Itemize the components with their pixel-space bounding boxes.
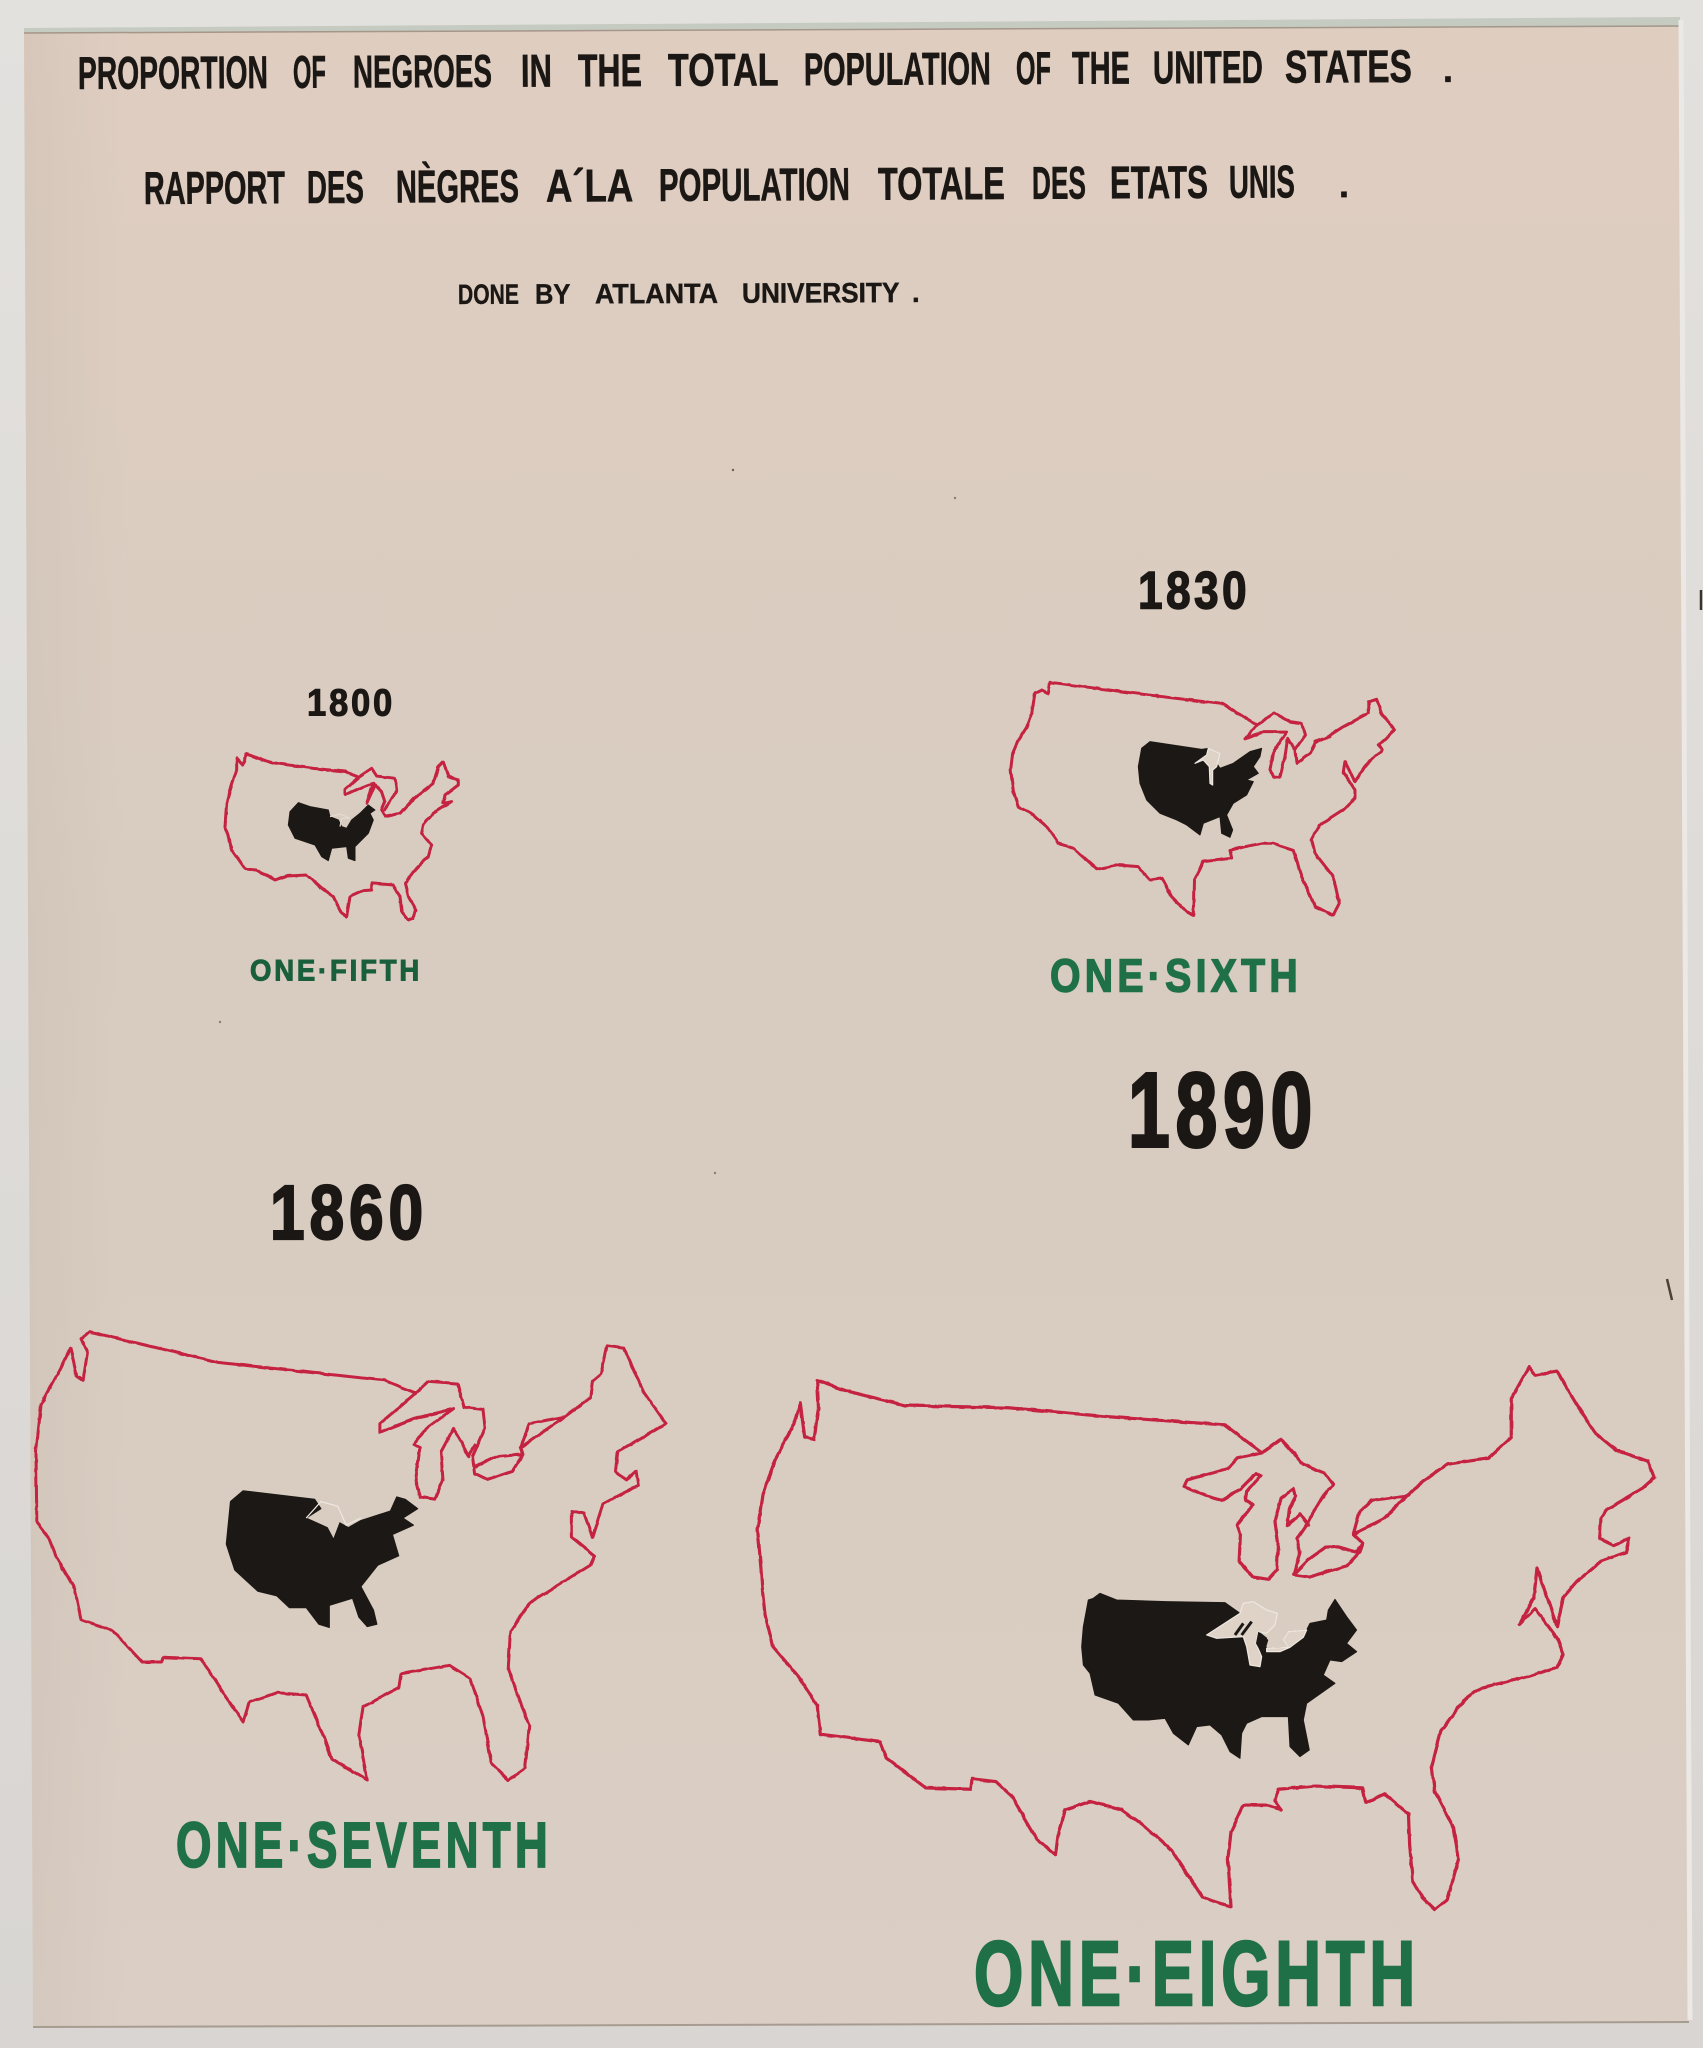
title: English: THE <box>578 44 642 96</box>
credit line: DONE <box>458 279 519 310</box>
black proportion map 1830 <box>1138 742 1262 837</box>
year 1890: 1890 <box>1128 1052 1318 1170</box>
title: French: RAPPORT <box>144 161 285 214</box>
black proportion map 1800 <box>288 803 375 861</box>
title: English: NEGROES <box>353 45 492 98</box>
fraction one-fifth: ONE·FIFTH <box>250 954 422 988</box>
title: English: TOTAL <box>668 43 778 96</box>
black proportion map 1890 <box>1082 1593 1357 1758</box>
title: French: POPULATION <box>659 158 850 211</box>
title: French: DES <box>307 161 364 213</box>
credit line: BY <box>535 279 571 310</box>
year 1860: 1860 <box>270 1170 428 1256</box>
title: English: STATES <box>1285 40 1412 93</box>
title: English: . <box>1443 49 1453 90</box>
panel: 1860 <box>36 1170 666 1881</box>
fraction one-seventh: ONE·SEVENTH <box>176 1809 552 1881</box>
title: English: IN <box>521 45 552 97</box>
title: English: POPULATION <box>804 42 991 95</box>
title: French: UNIS <box>1229 155 1295 208</box>
panel: 1830 <box>1011 561 1395 1001</box>
map outline 1890 <box>758 1367 1654 1910</box>
title: French: TOTALE <box>878 157 1005 210</box>
map outline 1830 <box>1011 682 1395 915</box>
map outline 1860 <box>36 1332 666 1780</box>
title: French: A´LA <box>546 159 632 212</box>
title: English: THE <box>1072 41 1130 94</box>
title: English: OF <box>293 46 326 98</box>
credit line: ATLANTA <box>595 278 718 309</box>
title: French: ETATS <box>1110 156 1208 208</box>
title: English: OF <box>1016 42 1051 94</box>
fraction one-eighth: ONE·EIGHTH <box>974 1923 1420 2025</box>
credit line: UNIVERSITY <box>742 277 900 309</box>
map outline 1800 <box>225 754 458 920</box>
title: English: UNITED <box>1153 41 1263 93</box>
title: French: . <box>1339 164 1349 205</box>
panel: 1890 <box>758 1052 1654 2025</box>
year 1800: 1800 <box>307 682 395 724</box>
panel: 1800 <box>225 682 458 988</box>
title: English: PROPORTION <box>78 46 268 99</box>
credit line: . <box>912 277 920 308</box>
year 1830: 1830 <box>1138 561 1250 620</box>
black proportion map 1860 <box>226 1491 418 1628</box>
title: French: NÈGRES <box>396 160 519 213</box>
fraction one-sixth: ONE·SIXTH <box>1050 949 1302 1001</box>
title: French: DES <box>1032 157 1086 209</box>
